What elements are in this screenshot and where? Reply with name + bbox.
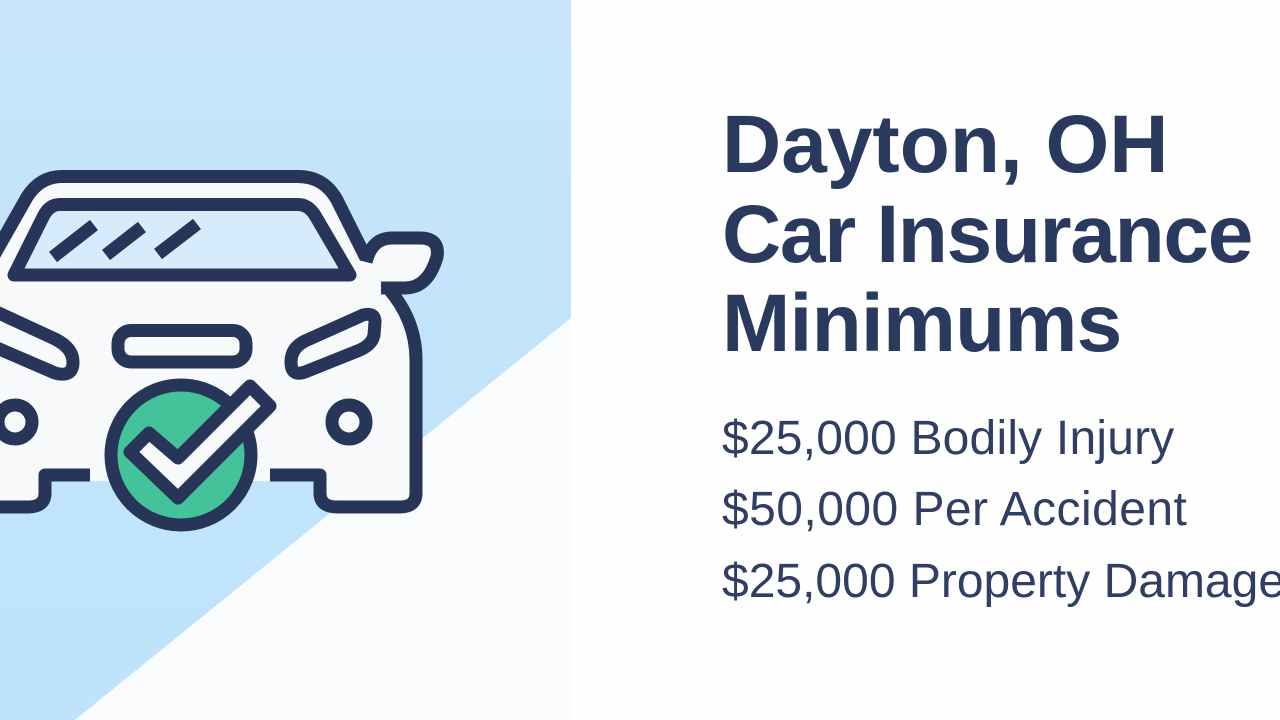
item: per accident: $50,000 Per Accident — [722, 483, 1187, 536]
side mirror — [366, 238, 437, 288]
item: property damage: $25,000 Property Damage — [722, 555, 1280, 608]
check badge — [111, 385, 270, 525]
wiper marks — [53, 224, 197, 257]
left headlight — [0, 309, 73, 374]
windshield — [14, 204, 350, 275]
icon: car with check badge — [0, 170, 444, 532]
title: Minimums — [722, 278, 1121, 369]
title: Dayton, OH — [722, 99, 1168, 190]
title — [722, 99, 1252, 369]
car body — [0, 176, 416, 507]
left fog light — [0, 405, 32, 439]
grille — [118, 330, 246, 362]
title: Car Insurance — [722, 189, 1252, 280]
right headlight — [291, 314, 375, 373]
right fog light — [332, 405, 366, 439]
coverage list — [722, 414, 1280, 608]
